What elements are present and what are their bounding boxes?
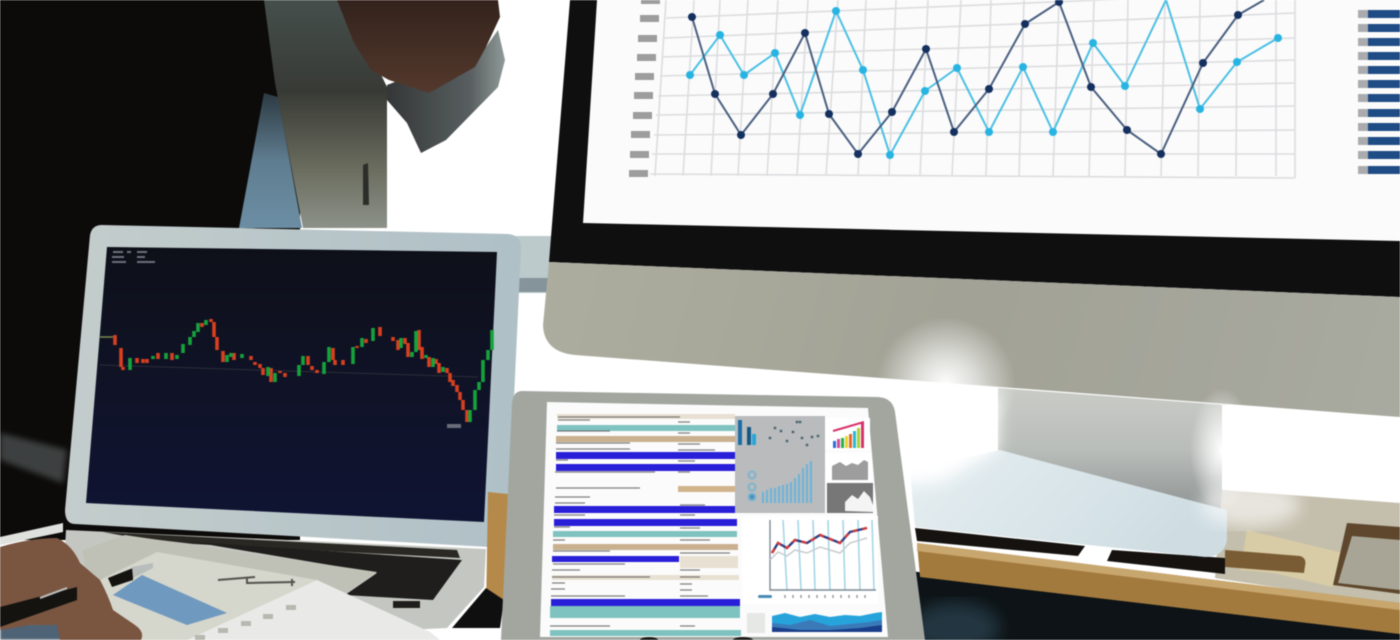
rainbow bars — [833, 422, 864, 448]
paper: grey tick marks — [195, 605, 296, 640]
stock chart — [770, 520, 876, 590]
blue area chart — [772, 612, 882, 632]
person: dark suit jacket — [0, 0, 300, 540]
person: hand — [337, 0, 500, 93]
stock chart x-axis — [758, 595, 865, 598]
background: wall strip beside laptop — [510, 236, 552, 293]
light blue series — [686, 0, 1282, 159]
tablet: body — [501, 391, 925, 640]
desk riser: wooden front strip — [917, 543, 1400, 634]
laptop: screen — [86, 247, 497, 522]
person: sleeve — [387, 30, 505, 153]
desk riser: black gap under monitor base — [915, 528, 1225, 574]
glow: lens flare below monitor — [876, 317, 1016, 453]
laptop: silver lid — [65, 225, 521, 548]
circular icons — [748, 472, 756, 500]
grey analytics panel — [735, 416, 825, 513]
glow: flare at neck edge — [1190, 388, 1254, 512]
hand holding pen — [0, 538, 142, 640]
paper: middle sheet — [100, 552, 317, 640]
rising candles — [130, 320, 492, 422]
person: blue shirt — [239, 93, 302, 228]
rainbow bar card — [825, 418, 870, 450]
pen: front and silver tip — [108, 563, 153, 587]
large stock chart card — [742, 516, 878, 604]
laptop: keyboard keys — [193, 542, 462, 600]
paper: back sheet — [82, 535, 430, 640]
monitor stand: base — [910, 450, 1227, 557]
right side bright window panel — [1222, 405, 1400, 503]
grey area shape — [832, 460, 868, 480]
desk riser: beige top surface — [1215, 490, 1400, 606]
monitor: black bezel — [549, 0, 1400, 297]
scatter dots — [769, 421, 819, 446]
glow: lower riser flare — [1200, 483, 1300, 527]
y-axis tick labels as grey blocks — [629, 0, 660, 177]
falling candles — [115, 319, 467, 422]
desk: dark blue paper at corner — [0, 622, 100, 640]
desk dark patch by tablet — [452, 588, 504, 628]
grey area card — [825, 453, 872, 482]
laptop: hinge shadow — [103, 532, 460, 558]
floor shadow below the riser — [900, 570, 1400, 640]
monitor: silver chin — [543, 262, 1400, 417]
start tick — [100, 336, 113, 338]
monitor stand: neck — [998, 388, 1228, 512]
baseline — [100, 365, 478, 377]
pen: body behind finger — [0, 587, 77, 627]
white screen area — [540, 402, 888, 637]
mini line thumbnail — [747, 613, 765, 633]
paper: white corner — [430, 627, 500, 640]
laptop: trackpad key — [393, 601, 420, 608]
paper: blue bar on sheet — [113, 575, 227, 625]
price label — [447, 424, 461, 428]
paper: front white sheet — [187, 580, 500, 640]
spreadsheet highlight rows — [550, 414, 741, 636]
person: grey jacket panel — [264, 0, 387, 228]
dark card — [827, 483, 873, 513]
laptop screen: top-left readout — [112, 251, 155, 263]
laptop: keyboard deck — [60, 530, 486, 640]
dark blue series — [688, 0, 1264, 158]
tablet: screen content — [540, 402, 888, 637]
paper: small sparkline — [218, 577, 295, 586]
desk riser: paper block — [1240, 530, 1343, 587]
bar list on monitor right edge — [1358, 10, 1400, 174]
desk riser: slot — [1225, 550, 1305, 573]
small blue bars — [738, 420, 756, 445]
spreadsheet text lines — [550, 417, 730, 626]
wooden block behind tablet — [486, 492, 508, 610]
line chart on monitor — [629, 0, 1295, 178]
white area in dark card — [845, 491, 873, 512]
tablet: dark stand notches — [640, 637, 753, 640]
chart grid — [650, 0, 1295, 178]
desk riser: recessed tray — [1333, 523, 1400, 594]
desk surface left — [0, 523, 63, 545]
candlestick chart on laptop — [100, 319, 492, 428]
rising light-blue bars — [762, 461, 812, 503]
sheen on dark desk — [910, 602, 1000, 640]
glow: left white zone over the stand — [830, 392, 998, 490]
monitor: white screen — [583, 0, 1400, 241]
